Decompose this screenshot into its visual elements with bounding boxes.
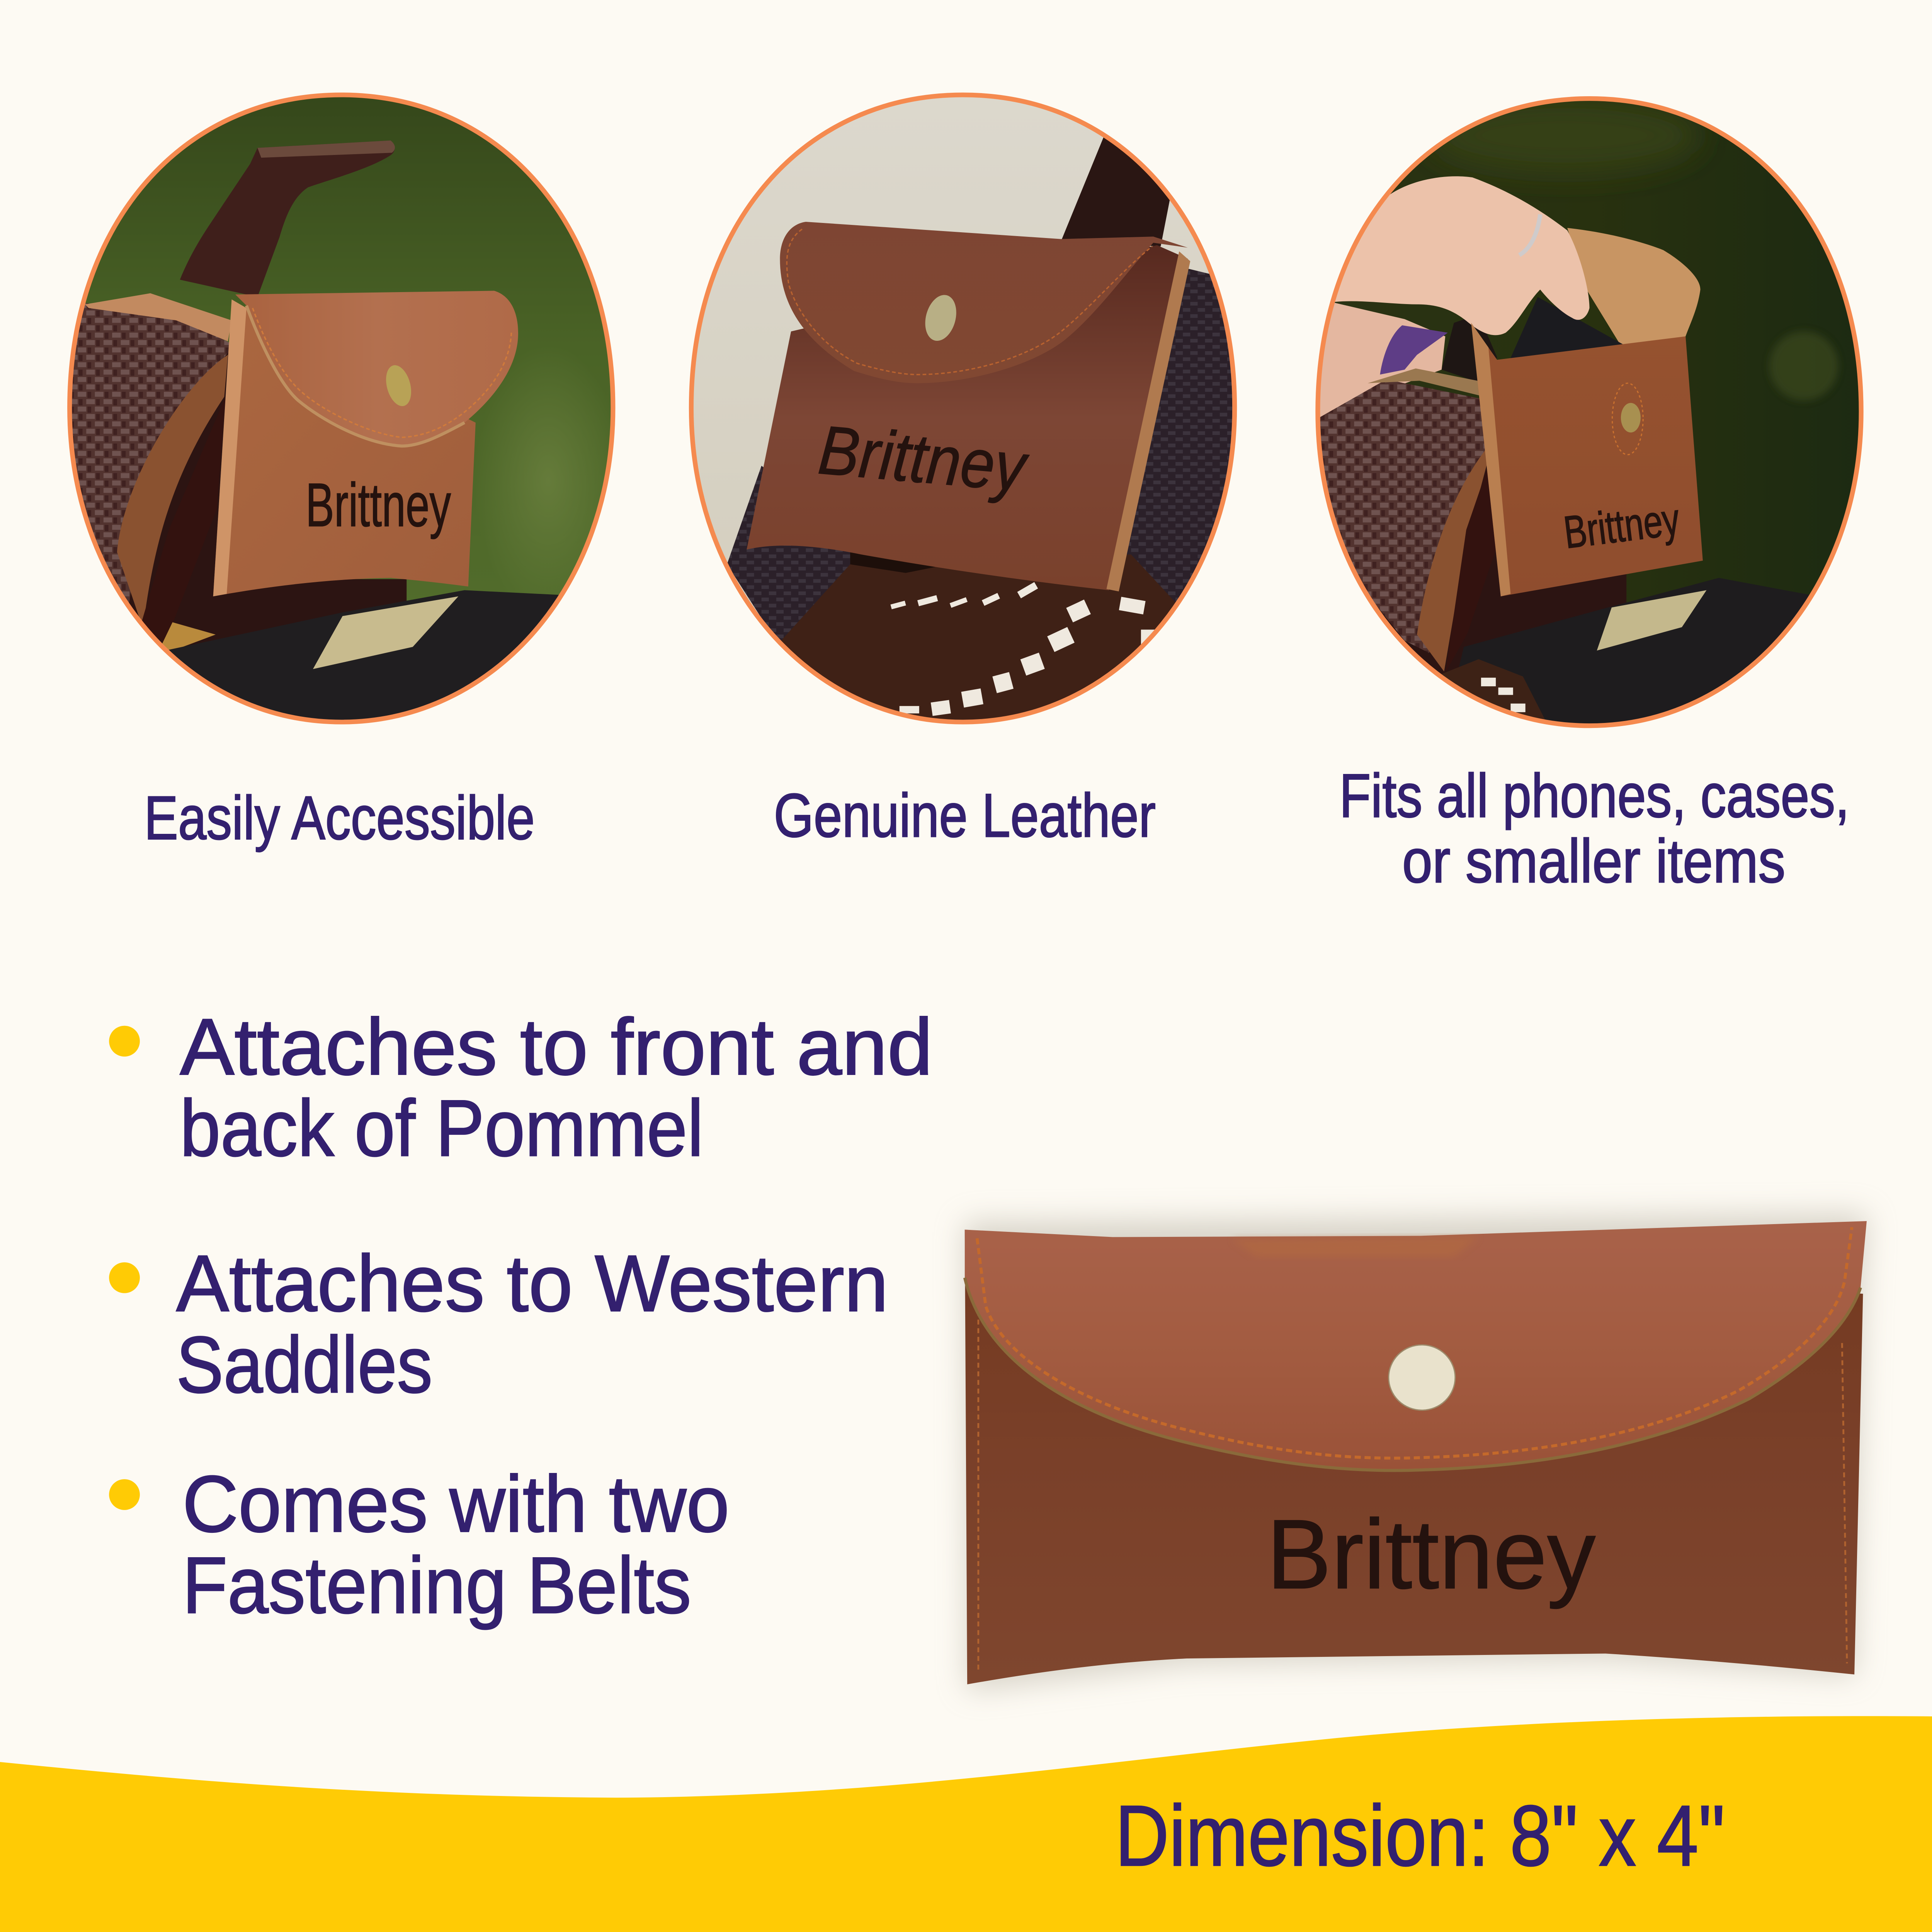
feature 3: Comes with two: [182, 1459, 730, 1549]
phone: [1508, 297, 1626, 370]
saddle fleece tan: [158, 622, 216, 653]
feature 1: Attaches to front and: [180, 1002, 933, 1092]
inner flap suede: [1567, 228, 1701, 349]
pouch side edge: [1107, 252, 1190, 592]
caption: fits all phones: Fits all phones, cases,: [1339, 761, 1849, 830]
flap stitching: [787, 229, 1152, 374]
stitched circle: [1612, 383, 1643, 455]
black pad: [123, 590, 579, 739]
feature 3: Fastening Belts: [182, 1540, 691, 1630]
forearm: [1306, 296, 1445, 437]
flap rough edge: [965, 1278, 1861, 1471]
suede corner: [1435, 659, 1549, 727]
bullet list: features: [109, 1002, 933, 1630]
saddle tooled leaf: [1417, 440, 1493, 672]
dimension label: Dimension: 8" x 4": [1115, 1788, 1725, 1884]
feature 1: back of Pommel: [180, 1083, 704, 1173]
caption: fits all phones: or smaller items: [1402, 827, 1786, 895]
white lacing: [890, 582, 1161, 716]
feature 2: Attaches to Western: [176, 1238, 888, 1328]
pouch body: [213, 302, 476, 596]
ring: [1519, 214, 1540, 255]
panel: photo fits all phones: [1306, 86, 1873, 739]
engraved name: Brittney: [1561, 493, 1682, 558]
saddle tooled leaf: [117, 355, 228, 628]
saddle basket weave: [72, 303, 229, 603]
black pad: [1442, 578, 1823, 739]
engraved name: Brittney: [816, 411, 1032, 506]
feature 1: [109, 1002, 933, 1173]
saddle strap: [85, 293, 231, 341]
caption: genuine leather: Genuine Leather: [774, 781, 1156, 850]
pouch shadow: [965, 1214, 1867, 1690]
yellow wave banner: [0, 1716, 1932, 1932]
engraved name: Brittney: [1267, 1499, 1596, 1609]
purple watch band: [1380, 325, 1448, 374]
feature 2: [109, 1238, 888, 1409]
pouch side edge: [213, 299, 247, 596]
product photo: leather pouch: [965, 1214, 1867, 1690]
engraved name: Brittney: [306, 471, 451, 539]
caption: fits all phones: [1339, 761, 1849, 895]
pouch flap: [965, 1221, 1867, 1471]
pouch body: [965, 1230, 1863, 1684]
saddle horn: [180, 141, 395, 297]
basket weave left: [727, 466, 875, 647]
saddle basket weave: [1306, 379, 1496, 653]
panel: photo easily accessible: [61, 86, 628, 739]
photo outline: [1318, 99, 1861, 726]
photo outline: [691, 95, 1235, 722]
pouch side edge: [1471, 323, 1510, 596]
saddle base: [129, 352, 406, 647]
caption: easily accessible: Easily Accessible: [144, 784, 535, 852]
flap top glow: [1232, 1237, 1479, 1257]
photo outline: [70, 95, 613, 722]
saddle dark edge: [141, 397, 226, 643]
feature 2: Saddles: [176, 1320, 432, 1409]
saddle base: [1306, 419, 1626, 739]
pad patch: [1597, 590, 1706, 651]
pad patch: [313, 596, 458, 669]
white lacing: [1481, 678, 1526, 712]
hand: [1334, 176, 1590, 335]
flap rough edge: [247, 306, 464, 446]
side stitching: [978, 1294, 1847, 1670]
brass snap: [1621, 403, 1641, 432]
saddle horn: [1061, 133, 1172, 247]
photo background: dark green: [1306, 86, 1873, 739]
pouch body: [1471, 323, 1703, 596]
feature 3: [109, 1459, 730, 1630]
panel: photo genuine leather: [684, 86, 1245, 733]
metal snap: [1389, 1345, 1455, 1410]
saddle dark edge: [1445, 444, 1498, 673]
basket weave right: [1120, 267, 1238, 690]
flap stitching: [253, 308, 511, 437]
brass snap: [382, 362, 415, 409]
pouch flap: [780, 222, 1188, 383]
saddle horn base: [1442, 314, 1497, 384]
pouch flap: [235, 291, 518, 446]
pouch body: [747, 245, 1188, 590]
photo background: green foliage: [85, 97, 611, 601]
suede skirt: [780, 554, 1183, 727]
photo background: beige: [684, 86, 1245, 733]
flap stitching: [977, 1227, 1852, 1458]
brass snap: [920, 291, 961, 344]
saddle strap: [1368, 368, 1490, 398]
dark gap: [850, 542, 1121, 579]
